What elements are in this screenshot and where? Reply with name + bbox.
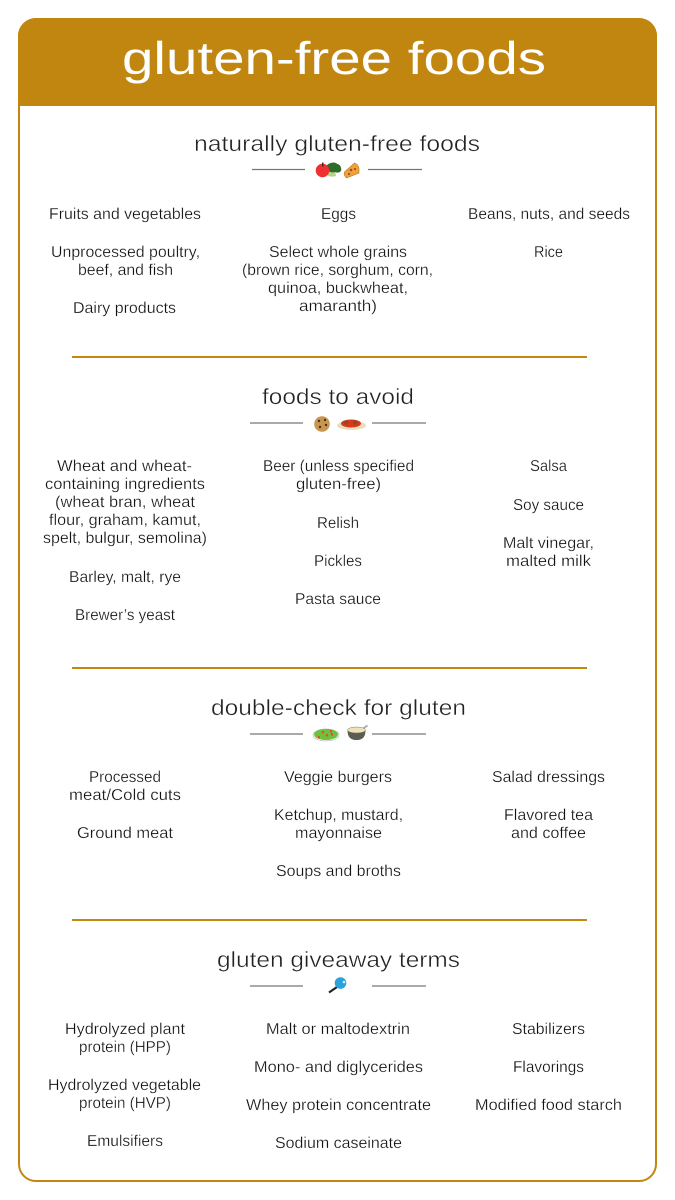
column: right: Salsa xyxy=(530,458,567,475)
column: centre: (brown rice, sorghum, corn, xyxy=(242,262,433,279)
column: left xyxy=(43,458,207,624)
column: left: protein (HPP) xyxy=(79,1039,171,1056)
heading: naturally gluten-free foods: naturally gluten-free foods xyxy=(194,131,480,156)
column: centre: Eggs xyxy=(321,206,356,223)
column: centre xyxy=(263,458,414,608)
column: left xyxy=(69,769,181,842)
column: right: Salad dressings xyxy=(492,769,605,786)
column: centre xyxy=(242,206,433,315)
column: left: Processed xyxy=(89,769,161,786)
column: centre: Malt or maltodextrin xyxy=(266,1021,410,1038)
column: left: meat/Cold cuts xyxy=(69,787,181,804)
column: centre: Soups and broths xyxy=(276,863,401,880)
title: gluten-free foods xyxy=(122,32,546,84)
icons: cookie, pasta with rules xyxy=(250,416,426,432)
column: right: Flavored tea xyxy=(504,807,593,824)
column: right: Stabilizers xyxy=(512,1021,585,1038)
column: right: and coffee xyxy=(511,825,586,842)
heading: double-check for gluten: double-check for gluten xyxy=(211,695,466,720)
column: left: Unprocessed poultry, xyxy=(51,244,200,261)
column: left: containing ingredients xyxy=(45,476,205,493)
column: centre: mayonnaise xyxy=(295,825,382,842)
panel: foods to avoid xyxy=(43,384,594,624)
column: centre: quinoa, buckwheat, xyxy=(268,280,408,297)
column: right: Rice xyxy=(534,244,563,261)
column: left xyxy=(48,1021,201,1150)
column: centre xyxy=(274,769,403,880)
column: centre: Veggie burgers xyxy=(284,769,392,786)
icons: apple, broccoli, cheese with rules xyxy=(252,162,422,178)
column: right xyxy=(503,458,594,570)
column: centre: Whey protein concentrate xyxy=(246,1097,431,1114)
column: right: malted milk xyxy=(506,553,591,570)
column: right: Soy sauce xyxy=(513,497,584,514)
column: left: Wheat and wheat- xyxy=(57,458,192,475)
column: centre: gluten-free) xyxy=(296,476,381,493)
column: left: beef, and fish xyxy=(78,262,173,279)
column: centre: Sodium caseinate xyxy=(275,1135,402,1152)
column: left: Ground meat xyxy=(77,825,174,842)
column: right xyxy=(468,206,630,261)
column: right xyxy=(492,769,605,842)
column: left: Hydrolyzed plant xyxy=(65,1021,186,1038)
column: left: spelt, bulgur, semolina) xyxy=(43,530,207,547)
column: centre: Ketchup, mustard, xyxy=(274,807,403,824)
column: centre xyxy=(246,1021,431,1152)
header banner xyxy=(18,18,657,106)
column: left: Dairy products xyxy=(73,300,176,317)
column: centre: Mono- and diglycerides xyxy=(254,1059,423,1076)
column: left: Hydrolyzed vegetable xyxy=(48,1077,201,1094)
column: centre: Beer (unless specified xyxy=(263,458,414,475)
heading: gluten giveaway terms: gluten giveaway terms xyxy=(217,947,460,972)
panel: naturally gluten-free foods xyxy=(49,131,630,317)
column: right xyxy=(475,1021,622,1114)
column: left: Barley, malt, rye xyxy=(69,569,181,586)
column: right: Beans, nuts, and seeds xyxy=(468,206,630,223)
column: centre: Relish xyxy=(317,515,359,532)
icons: salad, soup bowl with rules xyxy=(250,726,426,741)
column: right: Modified food starch xyxy=(475,1097,622,1114)
column: left: Emulsifiers xyxy=(87,1133,163,1150)
column: centre: amaranth) xyxy=(299,298,377,315)
icon: magnifying glass with rules xyxy=(250,977,426,992)
panel: double-check for gluten xyxy=(69,695,605,880)
column: right: Malt vinegar, xyxy=(503,535,594,552)
column: centre: Pickles xyxy=(314,553,362,570)
heading: foods to avoid: foods to avoid xyxy=(262,384,414,409)
column: left: Brewer’s yeast xyxy=(75,607,176,624)
column: left xyxy=(49,206,201,317)
column: left: flour, graham, kamut, xyxy=(49,512,201,529)
column: centre: Select whole grains xyxy=(269,244,407,261)
column: left: protein (HVP) xyxy=(79,1095,171,1112)
column: right: Flavorings xyxy=(513,1059,584,1076)
column: left: Fruits and vegetables xyxy=(49,206,201,223)
panel: gluten giveaway terms xyxy=(48,947,622,1152)
column: centre: Pasta sauce xyxy=(295,591,381,608)
column: left: (wheat bran, wheat xyxy=(55,494,196,511)
